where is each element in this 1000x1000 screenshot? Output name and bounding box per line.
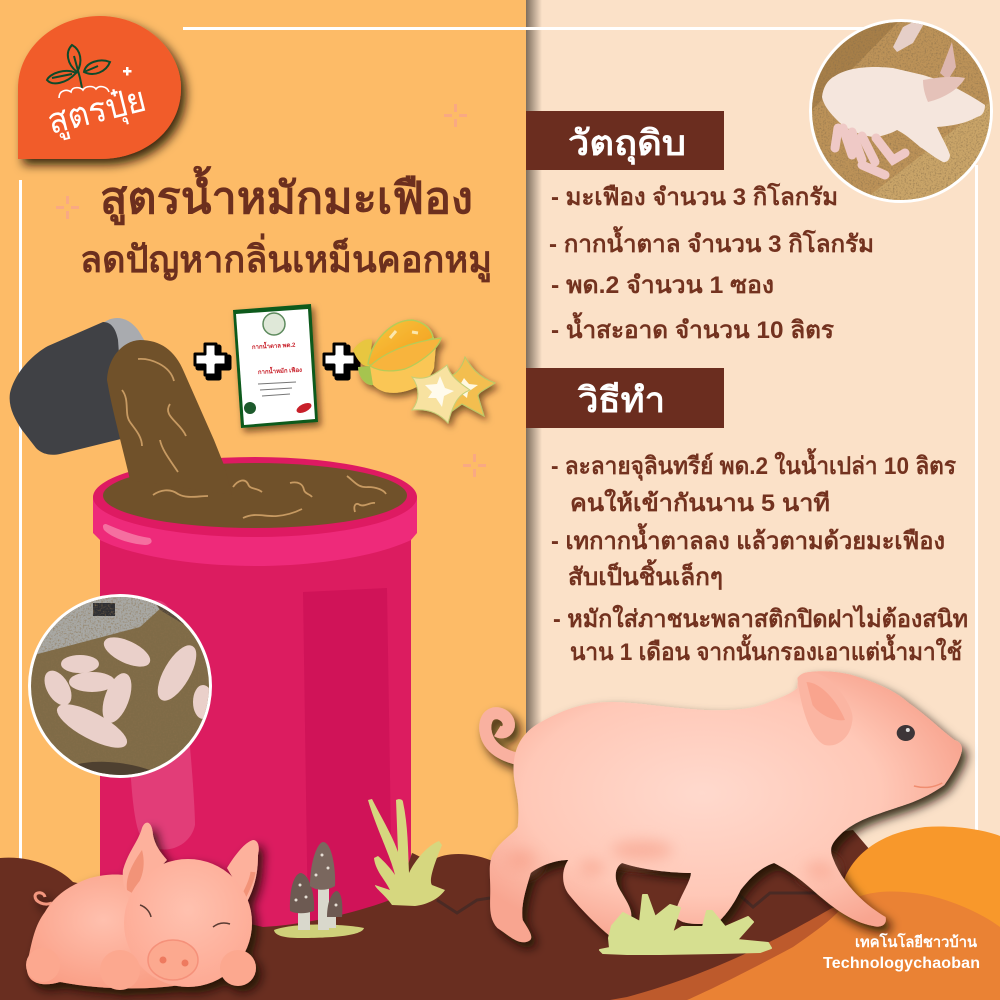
body <box>27 874 180 988</box>
title: สูตรน้ำหมักมะเฟือง <box>100 165 473 225</box>
bucket panel <box>303 588 392 930</box>
brand <box>823 932 980 972</box>
header: method <box>526 368 724 428</box>
title <box>80 165 492 283</box>
sleeping pig <box>26 823 259 990</box>
body <box>490 671 962 942</box>
method steps: คนให้เข้ากันนาน 5 นาที <box>570 488 830 517</box>
pouring compost <box>107 340 232 495</box>
cup pouring <box>10 318 232 495</box>
back slice <box>446 357 495 416</box>
bucket body <box>100 535 411 932</box>
method steps <box>551 447 968 666</box>
logo roots <box>59 86 109 98</box>
product card: กากน้ำตาล พด.2 <box>252 339 296 351</box>
middle band <box>610 893 900 1000</box>
upper hill <box>835 827 1000 1000</box>
snout <box>148 940 198 980</box>
photo: sow and piglets <box>809 19 993 204</box>
brand: Technologychaoban <box>823 955 980 972</box>
materials list: - น้ำสะอาด จำนวน 10 ลิตร <box>551 311 834 344</box>
tail <box>35 893 52 904</box>
logo plus <box>123 67 132 76</box>
method steps: - หมักใส่ภาชนะพลาสติกปิดฝาไม่ต้องสนิท <box>553 604 968 633</box>
tail <box>485 713 523 760</box>
ear right <box>227 840 259 902</box>
ground <box>0 830 870 1000</box>
ear left <box>123 823 167 900</box>
materials list: - กากน้ำตาล จำนวน 3 กิโลกรัม <box>549 225 874 258</box>
front slice <box>412 365 470 423</box>
mouth <box>914 783 942 787</box>
materials list <box>549 182 874 344</box>
eye <box>897 725 915 741</box>
logo badge <box>18 16 181 159</box>
header: materials: วัตถุดิบ <box>568 124 686 165</box>
method steps: นาน 1 เดือน จากนั้นกรองเอาแต่น้ำมาใช้ <box>570 633 962 666</box>
whole fruit <box>368 320 436 393</box>
product card <box>233 304 318 428</box>
bucket highlight <box>128 600 195 849</box>
method steps: - เทกากน้ำตาลลง แล้วตามด้วยมะเฟือง <box>551 522 945 555</box>
icon: sprout <box>47 45 110 88</box>
header: method: วิธีทำ <box>577 381 665 420</box>
icon: plus 2 <box>324 344 358 378</box>
bucket rim band <box>93 477 417 566</box>
logo text: สูตรปุ๋ย <box>44 80 150 143</box>
rim highlight <box>103 524 152 545</box>
method steps: สับเป็นชิ้นเล็กๆ <box>568 558 723 591</box>
subtitle: ลดปัญหากลิ่นเหม็นคอกหมู <box>80 233 492 283</box>
shading <box>506 840 834 878</box>
walking pig <box>485 671 962 942</box>
compost surface <box>103 463 407 528</box>
head <box>124 859 252 987</box>
product card: กากน้ำหมัก เฟือง <box>258 364 302 376</box>
eyes <box>140 905 230 927</box>
frame lines <box>19 27 978 860</box>
photo: pigs in pen <box>28 594 212 780</box>
materials list: - พด.2 จำนวน 1 ซอง <box>551 272 774 299</box>
brand: เทคโนโลยีชาวบ้าน <box>855 932 978 951</box>
rim inner ring <box>93 457 417 537</box>
method steps: - ละลายจุลินทรีย์ พด.2 ในน้ำเปล่า 10 ลิตร <box>551 447 956 482</box>
lower hill <box>687 892 1000 1000</box>
mushrooms <box>274 842 364 938</box>
materials list: - มะเฟือง จำนวน 3 กิโลกรัม <box>551 182 838 211</box>
grass right <box>600 895 771 954</box>
paws <box>26 948 60 982</box>
grass left <box>368 799 445 906</box>
icon: plus 1 <box>195 344 229 378</box>
bucket <box>93 457 417 932</box>
starfruit <box>353 320 495 423</box>
sparkles <box>56 104 486 477</box>
ear <box>797 672 853 746</box>
header: materials <box>526 111 724 170</box>
orange hills <box>610 827 1000 1000</box>
